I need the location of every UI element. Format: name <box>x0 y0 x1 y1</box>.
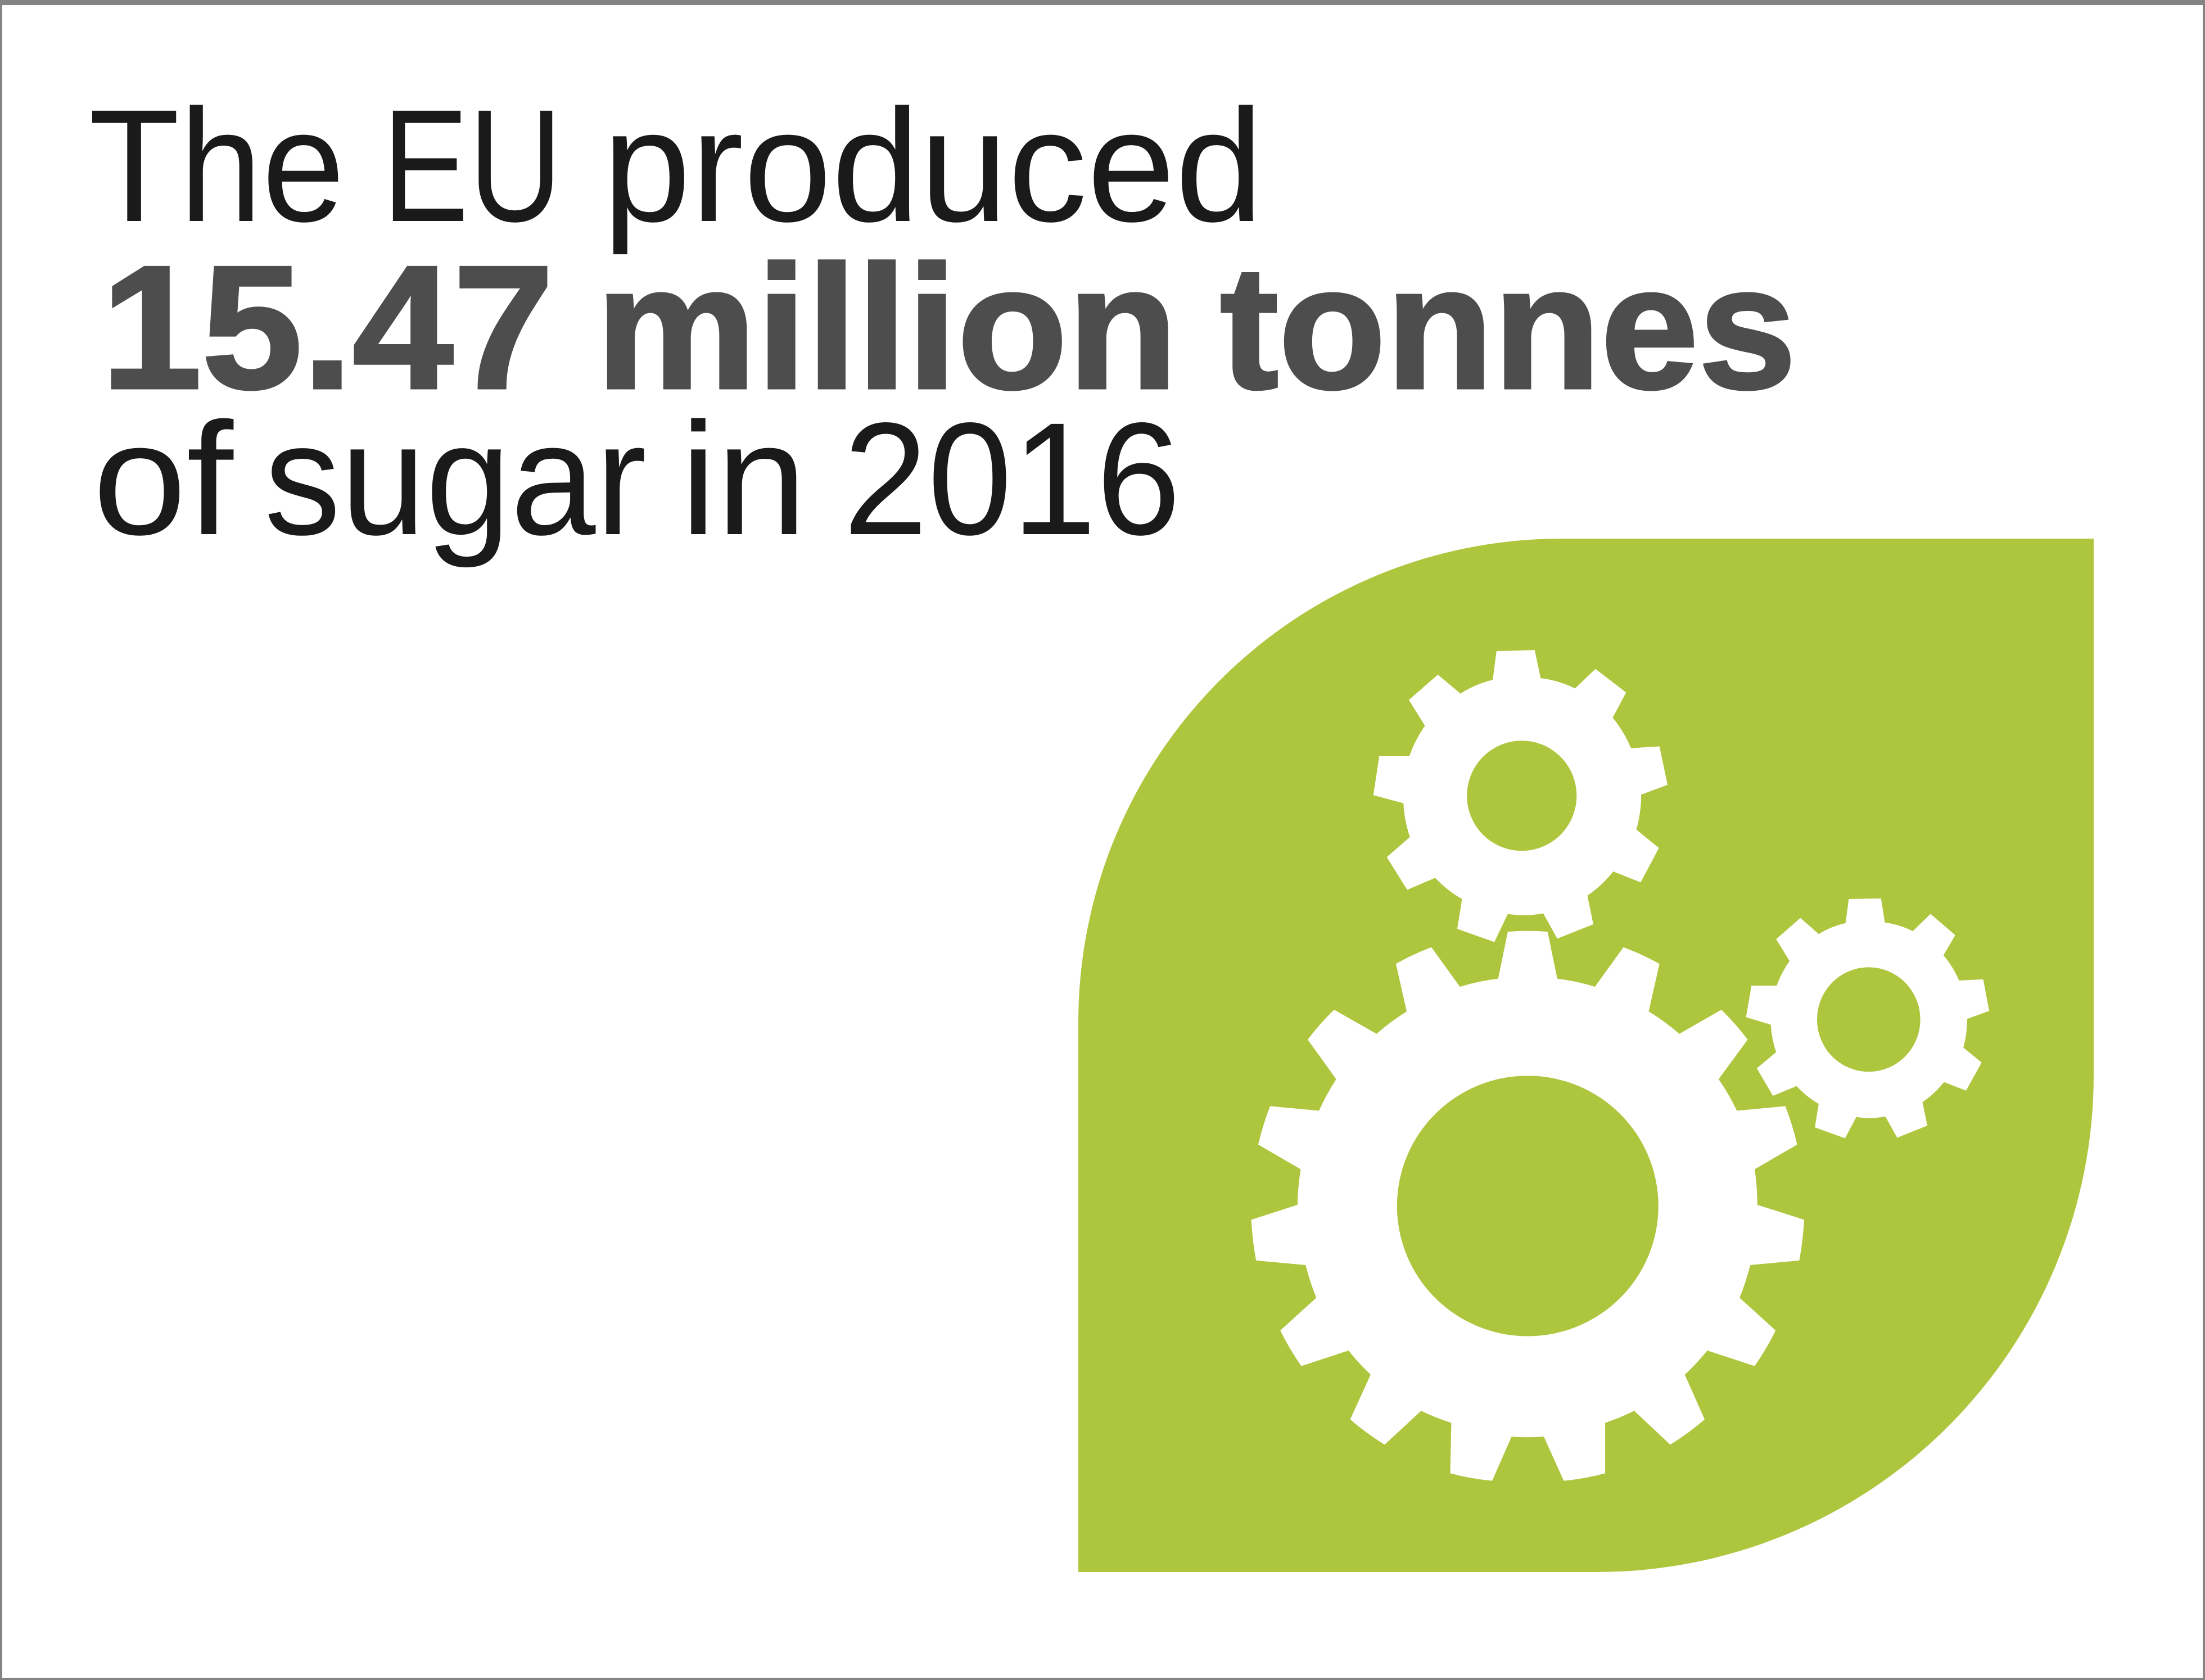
title line 3: of sugar in 2016 <box>93 390 1181 569</box>
title line 3: of sugar in 2016: in <box>680 390 807 568</box>
green leaf panel <box>1078 539 2094 1572</box>
title line 3: of sugar in 2016: sugar <box>264 390 647 569</box>
title line 3: of sugar in 2016: of <box>93 390 234 568</box>
title block <box>89 76 1796 569</box>
icon: medium gear <box>1373 650 1668 942</box>
title line 2: 15.47 million tonnes: 15.47 <box>101 230 554 426</box>
title line 1: The EU produced: The <box>89 76 345 255</box>
title line 1: The EU produced: EU <box>382 76 562 255</box>
title line 3: of sugar in 2016: 2016 <box>843 390 1181 568</box>
icon: small gear <box>1746 898 1989 1138</box>
title line 2: 15.47 million tonnes: tonnes <box>1220 230 1796 426</box>
title line 2: 15.47 million tonnes: million <box>596 230 1178 426</box>
title line 1: The EU produced <box>89 76 1263 256</box>
icon: large gear <box>1251 931 1804 1481</box>
icon: gears <box>1251 650 1989 1481</box>
title line 1: The EU produced: produced <box>603 76 1263 256</box>
title line 2: 15.47 million tonnes <box>101 230 1796 426</box>
